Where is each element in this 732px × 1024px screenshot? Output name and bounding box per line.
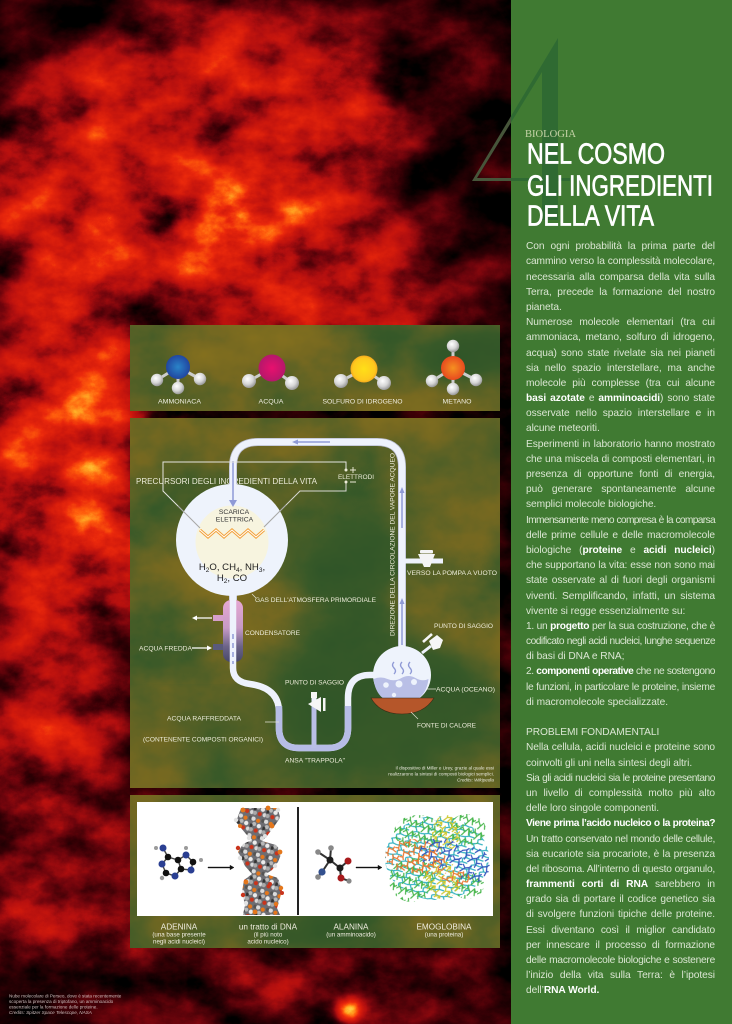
gas formula: , [262,562,265,573]
figure captions: negli acidi nucleici) [153,938,205,946]
reaction flask [373,646,431,704]
apparatus labels: ACQUA RAFFREDDATA [167,716,242,722]
panel: Miller-Urey apparatus [130,418,500,790]
body text: per innescare il processo di formazione [526,940,715,951]
gas formula: 2 [224,578,228,585]
body text: biologiche (proteine e acidi nucleici) [526,545,715,556]
apparatus labels: CONDENSATORE [245,630,301,637]
body text: presenza di opportune fonti di energia, [526,469,715,480]
large flask [176,461,288,596]
title [527,138,713,232]
body text: Numerose molecole elementari (tra cui [526,317,715,328]
body text: di macromolecole specializzate. [526,697,668,708]
apparatus credit: realizzarono la sintesi di composti biologici semplici. [388,772,494,776]
body text [526,241,716,996]
flask labels: SCARICA [219,509,250,516]
molecule: water [242,354,299,390]
figure captions: acido nucleico) [247,938,289,946]
body text: ammoniaca, metano, solfuro di idrogeno, [526,332,715,343]
figure captions: un tratto di DNA [239,922,298,932]
return tube with trap loop [233,590,378,748]
body text: Esperimenti in laboratorio hanno mostrato [526,439,715,450]
body text: pianeta. [526,302,562,313]
molecule: methane [426,340,482,395]
white figure box [137,802,493,916]
gas formula: 3 [259,567,263,574]
gas formula: 2 [206,567,210,574]
image caption: Credits: Spitzer Space Telescope, NASA [9,1010,92,1015]
body text: alcune meteoriti. [526,423,600,434]
flask labels: ELETTRICA [216,516,254,524]
figure captions: (il più noto [254,932,283,938]
background: molecular cloud nebula [0,0,511,1024]
body text: molecole più complesse (tra cui alcune [526,378,715,389]
image caption: essenziale per la formazione delle proteine. [9,1004,98,1010]
body text: sia eucariote sia procariote, è la presenza [526,849,715,860]
body text: PROBLEMI FONDAMENTALI [526,727,659,738]
body text: necessaria alla comparsa della vita sulla [526,272,715,283]
body text: Nella cellula, acidi nucleici e proteine sono [526,742,715,753]
sampling tap [422,634,443,653]
leader lines [252,594,436,722]
hemoglobin model [385,814,490,902]
adenine model [154,844,203,880]
apparatus labels [139,570,497,764]
body text: l’inizio della vita sulla Terra: è l’ipotesi [526,970,715,981]
body text: un livello di complessità molto più alto [526,788,715,799]
figure captions [152,922,472,946]
apparatus labels: PUNTO DI SAGGIO [434,623,493,630]
body text: le funzioni, in particolare le proteine, insieme [526,682,715,693]
body text: delle prime cellule e delle macromolecole [526,530,715,541]
figure captions: (una base presente [152,932,206,938]
panel: molecules [130,325,520,411]
figure captions: ADENINA [161,922,198,932]
heat source [371,698,434,714]
apparatus credit [388,766,494,782]
body text: Con ogni probabilità la prima parte del [526,241,715,252]
arrow [356,865,382,870]
body text: grado sia di portare il codice genetico sia [526,894,715,905]
body text: del ribosoma. All’interno di questo organulo, [526,864,715,875]
gas formula: H [199,562,206,573]
gas formula [199,562,265,585]
body text: viventi. Semplificando, infatti, un sistema [526,590,715,602]
trap valve [308,692,326,712]
apparatus labels: PUNTO DI SAGGIO [285,680,344,686]
heading: precursors: PRECURSORI DEGLI INGREDIENTI DELLA VITA [136,476,317,486]
body text: di svolgere funzioni tipiche delle proteine. [526,909,715,920]
side panel background [511,0,732,1024]
divider [297,807,299,915]
section label: BIOLOGIA [525,129,576,140]
body text: delle loro singole componenti. [526,803,659,814]
apparatus labels: ACQUA FREDDA [139,646,193,652]
body text: dell’RNA World. [526,985,599,996]
apparatus labels: GAS DELL'ATMOSFERA PRIMORDIALE [255,597,377,604]
electrodes label: ELETTRODI [338,474,374,481]
panel: biomolecules [130,795,500,948]
flask labels [216,509,254,524]
electrodes label [338,467,374,484]
glass tube circuit [233,442,443,650]
apparatus labels: ACQUA (OCEANO) [436,686,495,694]
body text: Terra, precede la formazione del nostro [526,287,715,298]
body text: vivente si regge essenzialmente su: [526,606,685,617]
body text: Immensamente meno compresa è la comparsa [526,515,715,526]
gas formula: , NH [240,562,259,573]
alanine model [315,845,352,884]
body text: 2. componenti operative che ne sostengono [526,666,715,677]
molecule: ammonia [151,355,206,394]
body text: Essi diventano così il miglior candidato [526,925,715,936]
body text: delle macromolecole biologiche e sostenere [526,955,715,966]
gas formula: H [217,573,224,584]
apparatus labels: (CONTENENTE COMPOSTI ORGANICI) [143,736,263,744]
body text: di basi di DNA e RNA; [526,651,624,662]
body text: coinvolti gli uni nella sintesi degli altri. [526,758,692,769]
vertical label: DIREZIONE DELLA CIRCOLAZIONE DEL VAPORE ACQUEO [390,453,396,636]
molecule labels: SOLFURO DI IDROGENO [322,398,402,406]
gas formula: 4 [236,567,240,574]
molecule labels: AMMONIACA [158,398,202,406]
body text: frammenti corti di RNA sarebbero in [526,879,715,890]
body text: osservate nello spazio interstellare e in [526,408,715,419]
apparatus credit: Credits: Wikipedia [457,778,494,782]
body text: semplici molecole biologiche. [526,499,656,510]
apparatus labels: ANSA "TRAPPOLA" [285,758,346,764]
body text: può generare spontaneamente alcune [526,484,715,495]
body text: state osservate al di fuori degli organismi [526,575,715,586]
body text: Un tratto conservato nel mondo delle cellule, [526,834,715,844]
image caption: Nube molecolare di Perseo, dove è stata recentemente [9,994,122,998]
body text: che una miscela di composti elementari, in [526,454,715,465]
figure captions: (una proteina) [425,932,463,938]
image caption: scoperta la presenza di triptofano, un amminoacido [9,999,114,1004]
gas formula: , CO [227,573,247,584]
electric discharge zigzag [200,530,264,537]
molecule: hydrogen sulfide [334,356,391,390]
image caption [9,994,122,1015]
figure captions: (un amminoacido) [326,932,376,938]
molecule labels: METANO [442,398,472,406]
condenser [213,600,243,662]
figure captions: EMOGLOBINA [416,922,472,932]
molecule labels: ACQUA [258,398,284,406]
body text: sia nello spazio interstellare, ma anche [526,363,715,374]
numeral 4 [472,38,570,220]
electrode wires [163,462,346,528]
vertical flow arrows [292,440,404,645]
flow arrows: cold water [192,616,212,650]
body text: acqua) sono state rivelate sia nei pianeti [526,348,715,358]
arrow [208,865,234,870]
apparatus labels: VERSO LA POMPA A VUOTO [407,570,497,577]
body text: Viene prima l’acido nucleico o la proteina? [526,818,715,829]
body text: basi azotate e amminoacidi) sono state [526,393,715,404]
title: NEL COSMO [527,138,665,170]
molecule labels [158,398,472,406]
body text: che supportano la vita: esse non sono mai [526,560,715,571]
body text: cammino verso la complessità molecolare, [526,256,715,267]
body text: codificato negli acidi nucleici, lunghe sequenze [526,636,715,647]
DNA model [234,806,284,915]
apparatus labels: FONTE DI CALORE [417,722,477,730]
apparatus credit: Il dispositivo di Miller e Urey, grazie al quale essi [396,766,494,770]
gas formula: O, CH [209,562,236,573]
body text: 1. un progetto per la sua costruzione, che è [526,621,715,632]
title: DELLA VITA [527,200,654,232]
vacuum valve [418,550,435,567]
figure captions: ALANINA [333,922,369,932]
body text: Sia gli acidi nucleici sia le proteine presentano [526,773,715,784]
